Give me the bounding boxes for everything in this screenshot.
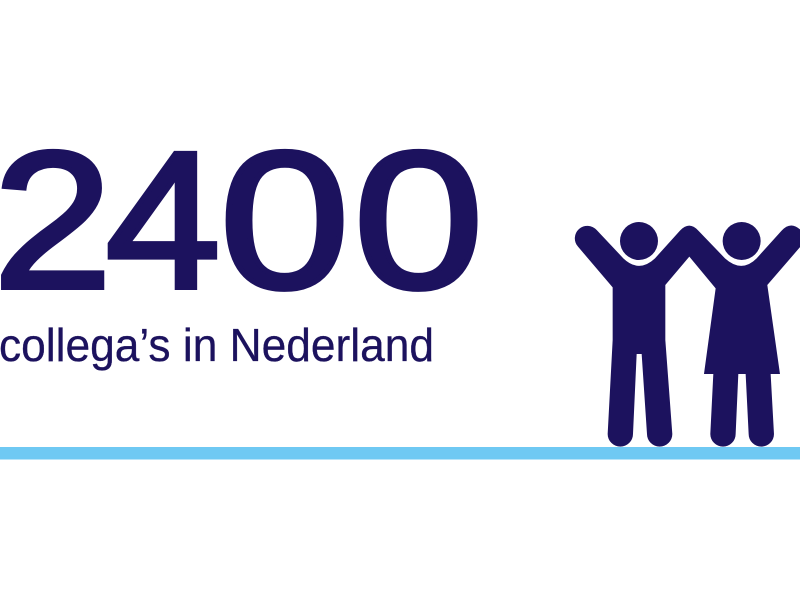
man head [620,222,658,260]
woman head [723,222,761,260]
big number [0,111,484,329]
big number: 4 [106,111,221,329]
joined bodies [575,225,800,447]
big number: 0 [354,111,484,329]
icon: two people cheering [575,222,800,447]
subtitle: collega’s in Nederland [0,319,434,371]
ground bar [0,447,800,460]
big number: 0 [220,111,350,329]
